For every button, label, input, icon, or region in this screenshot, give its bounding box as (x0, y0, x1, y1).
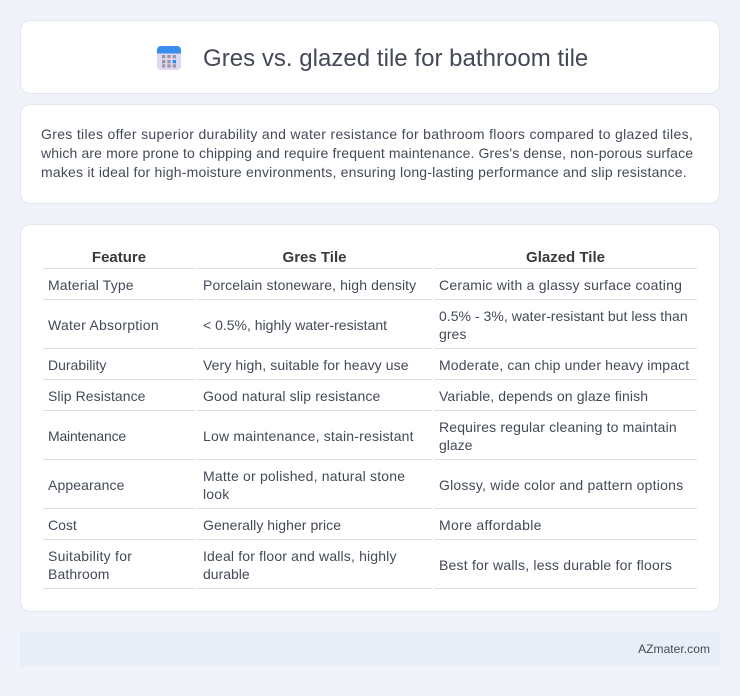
row: water absorption (48, 308, 688, 342)
row: suitability for bathroom (48, 548, 672, 582)
row: material type (48, 277, 682, 293)
row: maintenance (48, 419, 677, 453)
row: maintenance: Low maintenance, stain-resistant (203, 428, 414, 444)
summary paragraph (41, 126, 693, 180)
row: slip resistance: Variable, depends on glaze finish (439, 388, 648, 404)
panel: title card (20, 20, 720, 94)
row: durability: Durability (48, 357, 106, 373)
row: suitability for bathroom: Ideal for floor and walls, highly (203, 548, 397, 564)
row: suitability for bathroom: Bathroom (48, 566, 110, 582)
row: maintenance: Requires regular cleaning to maintain (439, 419, 677, 435)
row: appearance: look (203, 486, 229, 502)
icon: calendar tile (157, 46, 181, 70)
row: durability: Very high, suitable for heavy use (203, 357, 409, 373)
summary paragraph: which are more prone to chipping and require frequent maintenance. Gres's dense, non-porous surface (41, 145, 693, 161)
row: cost (48, 517, 542, 533)
row: cost: Cost (48, 517, 77, 533)
column headers: Gres Tile (283, 249, 346, 266)
row: material type: Porcelain stoneware, high density (203, 277, 416, 293)
summary paragraph: Gres tiles offer superior durability and water resistance for bathroom floors compared to glazed tiles, (41, 126, 693, 142)
column headers (92, 249, 605, 266)
row: slip resistance: Slip Resistance (48, 388, 146, 404)
row: suitability for bathroom: Suitability for (48, 548, 132, 564)
row: material type: Material Type (48, 277, 134, 293)
row: maintenance: glaze (439, 437, 472, 453)
row: material type: Ceramic with a glassy surface coating (439, 277, 682, 293)
row: appearance: Glossy, wide color and pattern options (439, 477, 683, 493)
row: slip resistance (48, 388, 648, 404)
row: water absorption: < 0.5%, highly water-resistant (203, 317, 387, 333)
column headers: Glazed Tile (526, 249, 605, 266)
row: slip resistance: Good natural slip resistance (203, 388, 380, 404)
row: cost: Generally higher price (203, 517, 341, 533)
row: suitability for bathroom: Best for walls, less durable for floors (439, 557, 672, 573)
panel: comparison table (20, 224, 720, 612)
row: water absorption: gres (439, 326, 466, 342)
row: water absorption: Water Absorption (48, 317, 159, 333)
row: appearance (48, 468, 683, 502)
footer bar (20, 632, 720, 666)
row: cost: More affordable (439, 517, 542, 533)
row: appearance: Matte or polished, natural stone (203, 468, 405, 484)
panel: summary text (20, 104, 720, 204)
row: maintenance: Maintenance (48, 428, 126, 444)
summary paragraph: makes it ideal for high-moisture environments, ensuring long-lasting performance and slip resistance. (41, 164, 687, 180)
comparison table (43, 249, 697, 589)
row: water absorption: 0.5% - 3%, water-resistant but less than (439, 308, 688, 324)
footer source label: AZmater.com (638, 642, 710, 656)
column headers: Feature (92, 249, 146, 266)
row: durability (48, 357, 690, 373)
title: Gres vs. glazed tile for bathroom tile (203, 45, 588, 72)
row: suitability for bathroom: durable (203, 566, 250, 582)
row: appearance: Appearance (48, 477, 125, 493)
row: durability: Moderate, can chip under heavy impact (439, 357, 689, 373)
